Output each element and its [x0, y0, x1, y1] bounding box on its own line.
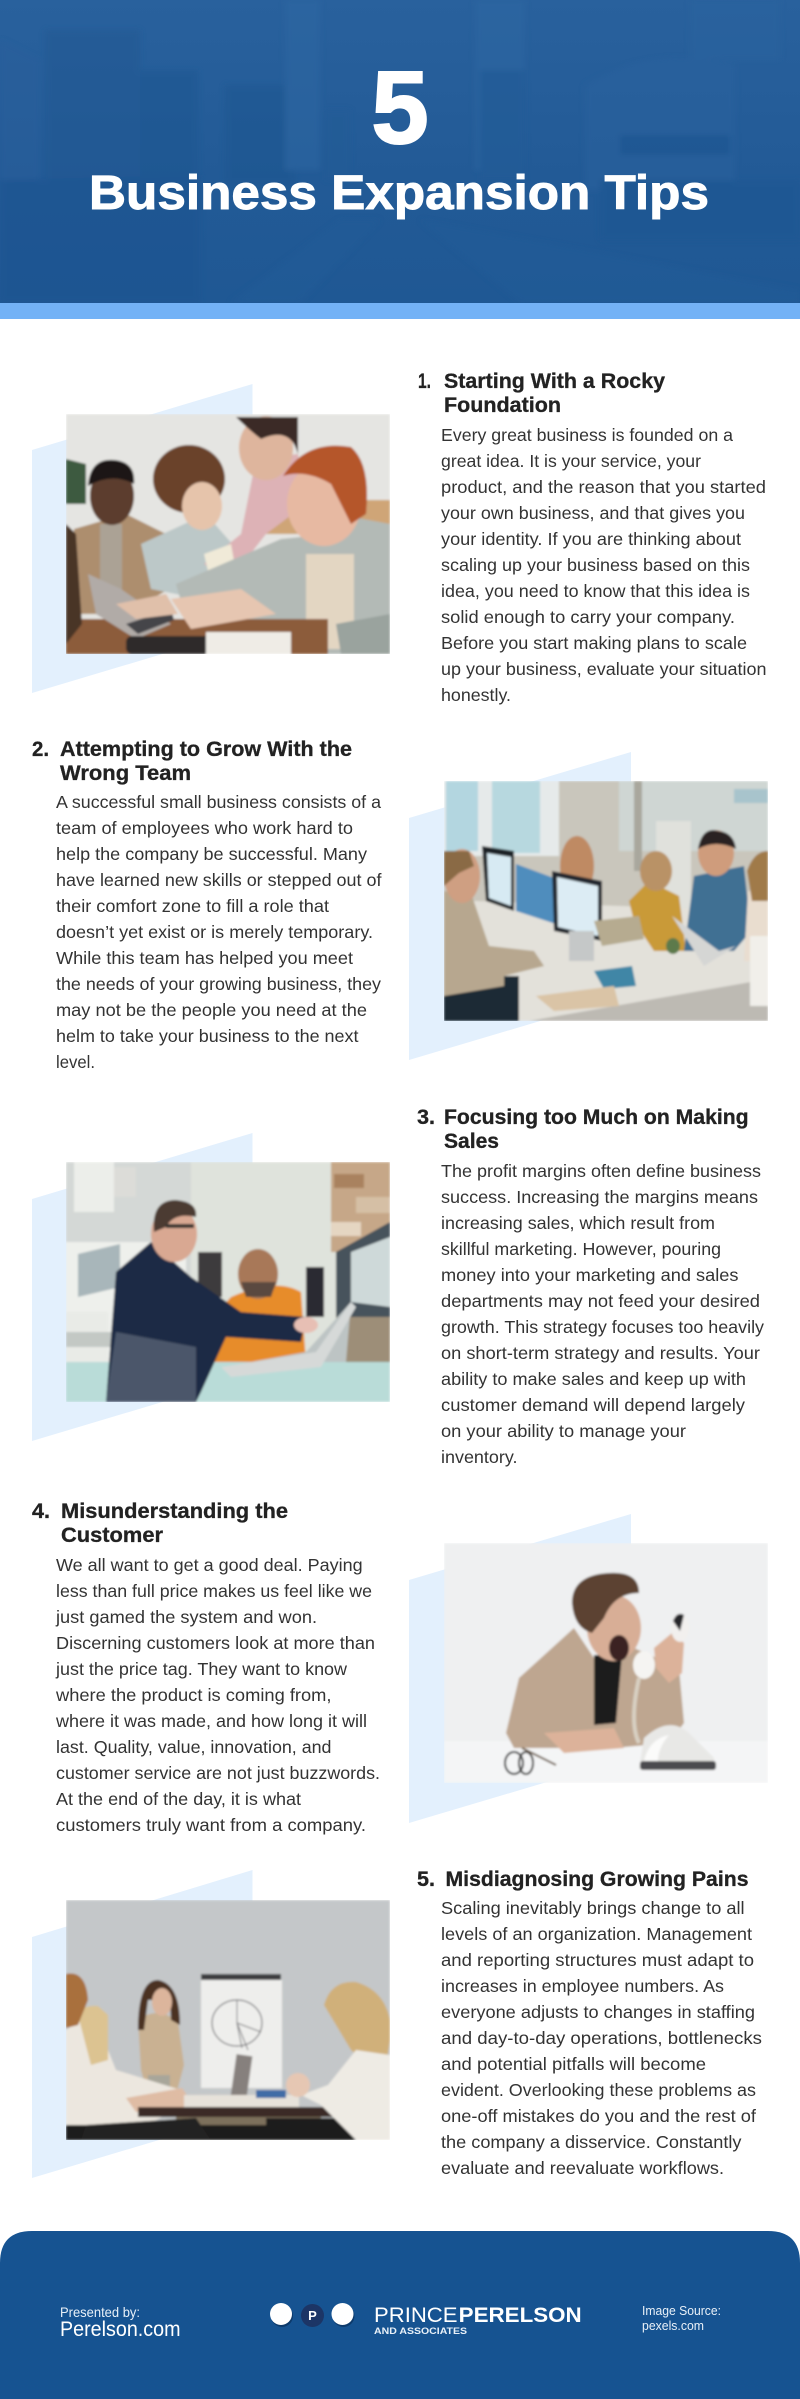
- text block: tip 5: everyone adjusts to changes in staffing: [441, 2002, 755, 2022]
- text block: tip 3: success. Increasing the margins means: [441, 1187, 758, 1207]
- text block: tip 5: increases in employee numbers. As: [441, 1976, 724, 1996]
- text block: tip 1: Every great business is founded on a: [441, 425, 733, 445]
- photo: four colleagues around a laptop: [66, 414, 390, 654]
- text block: tip 2: doesn’t yet exist or is merely temporary.: [56, 922, 373, 942]
- text block: tip 5: levels of an organization. Management: [441, 1924, 752, 1944]
- text block: tip 4: customers truly want from a company.: [56, 1815, 366, 1835]
- panel: tip 4: [32, 1500, 768, 1835]
- text block: tip 1: product, and the reason that you started: [441, 477, 766, 497]
- image source: [642, 2303, 721, 2333]
- text block: tip 5: the company a disservice. Constantly: [441, 2132, 742, 2152]
- accent strip: [0, 303, 800, 319]
- text block: tip 4: [55, 1555, 380, 1835]
- decorative shape behind photo 5: [32, 1870, 252, 2178]
- text block: tip 4: We all want to get a good deal. Paying: [56, 1555, 363, 1575]
- text block: tip 2: level.: [56, 1052, 95, 1072]
- text block: tip 3: The profit margins often define business: [441, 1161, 761, 1181]
- text block: tip 1: your identity. If you are thinking about: [441, 529, 741, 549]
- logo: Prince Perelson and Associates: P: [308, 2308, 317, 2323]
- heading: tip 1: [418, 370, 665, 417]
- text block: tip 4: just gamed the system and won.: [55, 1607, 317, 1627]
- text block: tip 1: scaling up your business based on this: [441, 555, 750, 575]
- heading: tip 4: [32, 1500, 288, 1547]
- panel: tip 3: [32, 1106, 764, 1467]
- heading: tip 5: 5.: [417, 1868, 435, 1891]
- text block: tip 2: the needs of your growing business, they: [56, 974, 381, 994]
- text block: tip 2: [56, 792, 382, 1072]
- logo: Prince Perelson and Associates: PERELSON: [459, 2304, 582, 2327]
- heading: tip 3: 3.: [417, 1106, 435, 1129]
- text block: tip 3: on your ability to manage your: [441, 1421, 686, 1441]
- text block: tip 1: great idea. It is your service, your: [441, 451, 701, 471]
- heading: tip 4: Misunderstanding the: [61, 1500, 288, 1523]
- text block: tip 5: Scaling inevitably brings change to all: [441, 1898, 745, 1918]
- footer: [0, 2231, 800, 2399]
- text block: tip 1: honestly.: [441, 685, 511, 705]
- text block: tip 1: idea, you need to know that this idea is: [441, 581, 750, 601]
- text block: tip 3: departments may not feed your desired: [441, 1291, 760, 1311]
- heading: tip 1: Foundation: [444, 394, 561, 417]
- heading: tip 4: Customer: [61, 1524, 163, 1547]
- text block: tip 1: [441, 425, 766, 705]
- text block: tip 3: growth. This strategy focuses too heavily: [441, 1317, 764, 1337]
- text block: tip 2: helm to take your business to the next: [56, 1026, 359, 1046]
- decorative shape behind photo 1: [32, 384, 252, 693]
- heading: tip 4: 4.: [32, 1500, 50, 1523]
- text block: tip 2: team of employees who work hard to: [56, 818, 353, 838]
- presented by: Presented by:: [60, 2304, 140, 2320]
- text block: tip 3: [441, 1161, 764, 1467]
- logo: Prince Perelson and Associates: [270, 2303, 582, 2336]
- text block: tip 4: just the price tag. They want to know: [55, 1659, 347, 1679]
- text block: tip 2: While this team has helped you meet: [56, 948, 353, 968]
- text block: tip 5: [441, 1898, 762, 2178]
- panel: tip 2: [32, 738, 768, 1072]
- heading: tip 2: 2.: [32, 738, 49, 761]
- text block: tip 2: may not be the people you need at the: [56, 1000, 367, 1020]
- text block: tip 4: where the product is coming from,: [55, 1685, 331, 1705]
- image source: pexels.com: [642, 2318, 704, 2333]
- text block: tip 3: skillful marketing. However, pouring: [441, 1239, 721, 1259]
- header banner: [0, 0, 800, 303]
- presented by: Perelson.com: [60, 2318, 180, 2341]
- heading: tip 2: Wrong Team: [60, 762, 191, 785]
- photo: man shouting into a telephone: [444, 1543, 768, 1783]
- text block: tip 4: customer service are not just buzzwords.: [56, 1763, 380, 1783]
- heading: tip 2: Attempting to Grow With the: [60, 738, 352, 761]
- text block: tip 5: evident. Overlooking these problems as: [441, 2080, 756, 2100]
- panel: tip 1: [32, 370, 766, 705]
- heading: tip 1: 1.: [418, 370, 431, 393]
- text block: tip 1: up your business, evaluate your situation: [441, 659, 766, 679]
- text block: tip 4: where it was made, and how long it will: [55, 1711, 367, 1731]
- heading: tip 3: Focusing too Much on Making: [444, 1106, 749, 1129]
- text block: tip 5: and day-to-day operations, bottlenecks: [441, 2028, 762, 2048]
- text block: tip 1: your own business, and that gives you: [441, 503, 745, 523]
- panel: tip 5: [32, 1868, 762, 2178]
- heading: tip 5: Misdiagnosing Growing Pains: [446, 1868, 748, 1891]
- text block: tip 1: solid enough to carry your company.: [441, 607, 735, 627]
- text block: tip 2: A successful small business consists of a: [56, 792, 381, 812]
- photo: open-plan office team: [444, 781, 768, 1021]
- text block: tip 2: their comfort zone to fill a role that: [56, 896, 329, 916]
- text block: tip 5: one-off mistakes do you and the rest of: [441, 2106, 756, 2126]
- logo: Prince Perelson and Associates: PRINCE: [374, 2304, 458, 2327]
- text block: tip 5: and reporting structures must adapt to: [441, 1950, 754, 1970]
- presented by: [60, 2304, 180, 2341]
- heading: tip 1: Starting With a Rocky: [444, 370, 665, 393]
- text block: tip 3: on short-term strategy and results. Your: [441, 1343, 760, 1363]
- decorative shape behind photo 3: [32, 1133, 252, 1441]
- text block: tip 3: increasing sales, which result from: [441, 1213, 715, 1233]
- text block: tip 4: last. Quality, value, innovation, and: [56, 1737, 332, 1757]
- decorative shape behind photo 2: [409, 752, 631, 1060]
- text block: tip 3: ability to make sales and keep up with: [441, 1369, 746, 1389]
- text block: tip 4: less than full price makes us feel like we: [56, 1581, 372, 1601]
- text block: tip 2: have learned new skills or stepped out of: [56, 870, 382, 890]
- text block: tip 1: Before you start making plans to scale: [441, 633, 747, 653]
- photo: two men at a laptop: [66, 1162, 390, 1402]
- text block: tip 2: help the company be successful. Many: [56, 844, 367, 864]
- title: Business Expansion Tips: [89, 167, 709, 220]
- title number: 5: [371, 50, 429, 165]
- text block: tip 4: At the end of the day, it is what: [56, 1789, 301, 1809]
- text block: tip 3: customer demand will depend largely: [441, 1395, 745, 1415]
- heading: tip 3: Sales: [444, 1130, 499, 1153]
- heading: tip 2: [32, 738, 352, 785]
- text block: tip 5: evaluate and reevaluate workflows.: [441, 2158, 724, 2178]
- text block: tip 3: inventory.: [441, 1447, 518, 1467]
- text block: tip 5: and potential pitfalls will become: [441, 2054, 706, 2074]
- text block: tip 3: money into your marketing and sales: [441, 1265, 739, 1285]
- logo: Prince Perelson and Associates: AND ASSOCIATES: [374, 2326, 467, 2336]
- decorative shape behind photo 4: [409, 1514, 631, 1823]
- heading: tip 3: [417, 1106, 749, 1153]
- text block: tip 4: Discerning customers look at more than: [56, 1633, 375, 1653]
- image source: Image Source:: [642, 2303, 721, 2318]
- photo: presenter at a flipchart in a meeting: [66, 1900, 390, 2140]
